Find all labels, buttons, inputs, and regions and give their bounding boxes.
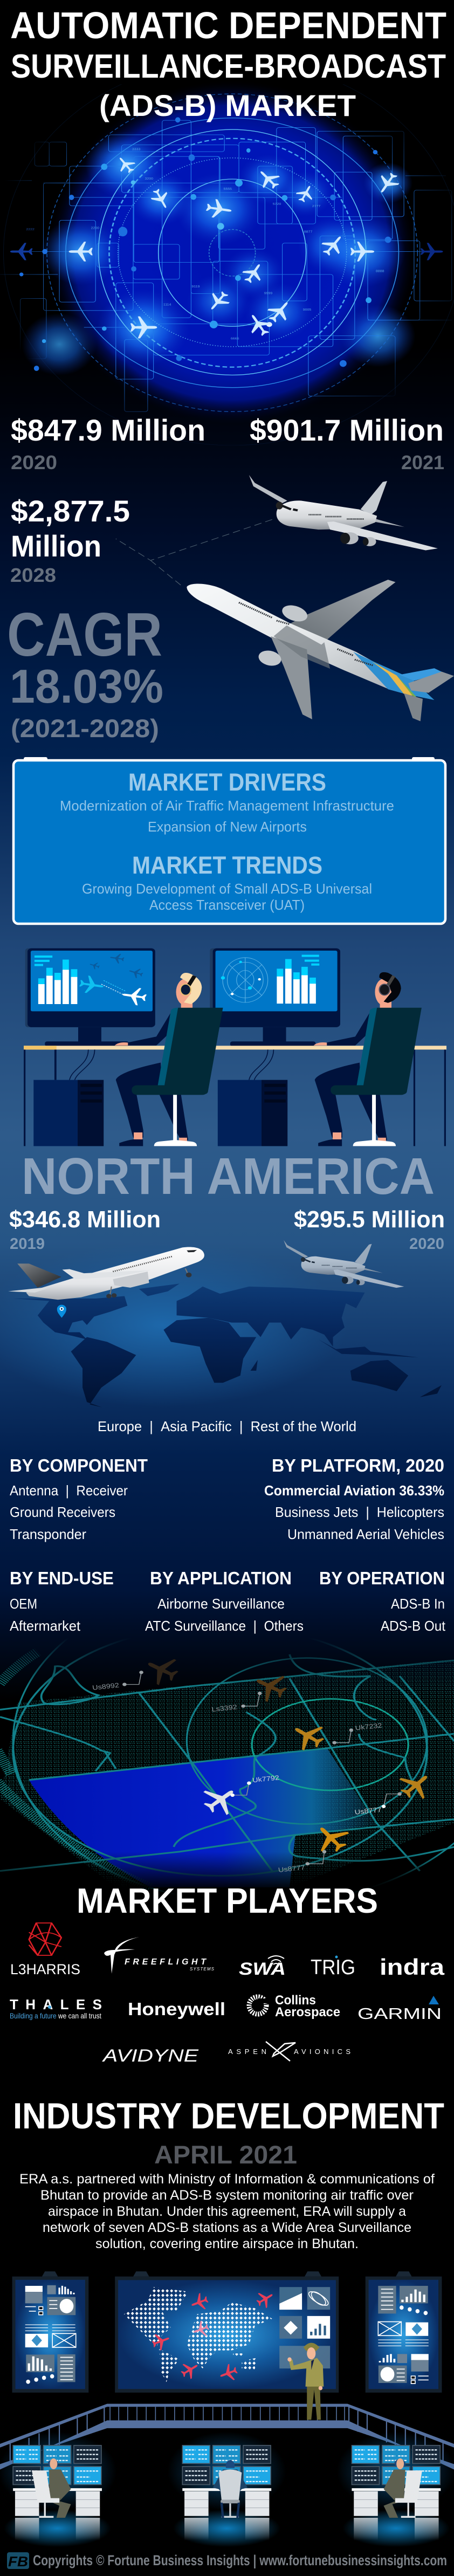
railing walkway	[0, 2404, 454, 2470]
logo: Garmin	[357, 1996, 442, 2023]
list: trends: Growing Development of Small ADS-B Universal	[82, 881, 372, 897]
computer towers	[33, 1080, 287, 1146]
dotted world map	[124, 2287, 272, 2382]
regional values: $295.5 Million	[294, 1206, 445, 1233]
outer tick ring	[0, 1652, 150, 1887]
radar labels: 9999	[264, 292, 273, 295]
list: trends: Access Transceiver (UAT)	[149, 897, 305, 913]
segment: by operation: ADS-B Out	[381, 1618, 446, 1634]
tracked aircraft: Uk7792	[252, 1774, 280, 1784]
heading: North America: NORTH AMERICA	[22, 1148, 435, 1205]
logo: Avidyne: AVIDYNE	[101, 2046, 199, 2065]
tracked aircraft: Us8777	[354, 1806, 382, 1816]
radar labels: 9119	[191, 285, 200, 288]
date: April 2021: APRIL 2021	[154, 2140, 297, 2169]
tracked aircraft: Us8992	[92, 1681, 120, 1692]
heading: market drivers: MARKET DRIVERS	[128, 768, 326, 796]
radar labels: 8877	[304, 230, 313, 233]
market size values: 2028	[10, 564, 56, 586]
list: drivers: Expansion of New Airports	[148, 819, 307, 835]
radar labels	[26, 148, 384, 340]
airplane: white jet taking off	[8, 1247, 204, 1300]
radar labels: 1114	[163, 303, 171, 306]
market size values: $847.9 Million	[11, 413, 205, 447]
radar labels: 5720	[273, 202, 281, 206]
airplane: small jet	[284, 1240, 404, 1288]
segment: by platform: BY PLATFORM, 2020	[272, 1455, 444, 1475]
segment: by operation: BY OPERATION	[319, 1568, 445, 1588]
screen: left wall display	[12, 2271, 88, 2393]
logo: SWA: SWA	[239, 1959, 286, 1979]
workstation: right	[337, 2432, 454, 2547]
logo: Thales	[10, 1996, 102, 2020]
grid and coast lines	[0, 1641, 454, 1893]
text block: development description: solution, covering entire airspace in Bhutan.	[95, 2236, 359, 2251]
logo: FreeFlight Systems: SYSTEMS	[190, 1967, 215, 1972]
logo: Thales: Building a future we can all trust	[10, 2011, 101, 2020]
desk	[24, 1046, 446, 1146]
segment: by platform: Business Jets | Helicopters	[275, 1504, 444, 1520]
radar labels: 3200	[145, 177, 153, 181]
logo: Honeywell: Honeywell	[128, 1999, 225, 2019]
continents	[13, 1283, 442, 1407]
airplane: large liveried jet	[187, 580, 454, 721]
side widgets	[279, 2287, 302, 2310]
plane glows	[22, 131, 416, 375]
market size values	[10, 413, 444, 586]
CAGR: CAGR	[7, 601, 162, 669]
text block: development description: ERA a.s. partnered with Ministry of Information & communications of	[19, 2172, 435, 2187]
illustration: airplanes	[116, 475, 454, 721]
radar labels: 8888	[376, 270, 384, 273]
highlighted sector	[29, 1748, 376, 1887]
logo: Fortune Business Insights: FB	[8, 2553, 28, 2570]
segment: by application: Airborne Surveillance	[157, 1596, 285, 1612]
regional values	[9, 1206, 445, 1253]
segment: by application: ATC Surveillance | Others	[145, 1618, 304, 1634]
segment: by platform	[264, 1455, 444, 1542]
radar labels: 2777	[312, 204, 321, 208]
radar labels: 2200	[91, 226, 100, 230]
market size values: $901.7 Million	[250, 413, 444, 447]
regional values: 2019	[10, 1235, 45, 1253]
segment: by component: BY COMPONENT	[10, 1455, 148, 1475]
regional values: 2020	[409, 1235, 444, 1253]
illustration: world map with planes	[0, 1240, 442, 1407]
tracked aircraft: Us8777	[278, 1864, 306, 1874]
logo: L3Harris	[10, 1923, 80, 1977]
logo: Trig: TRIG	[311, 1956, 355, 1979]
segment: by component: Transponder	[10, 1526, 86, 1542]
segment: by end-use: Aftermarket	[10, 1618, 81, 1634]
segment: by end-use	[10, 1568, 114, 1634]
segment: by component: Antenna | Receiver	[10, 1482, 128, 1499]
logo: FreeFlight Systems	[104, 1937, 215, 1974]
icon: location pin	[57, 1305, 66, 1318]
controller one	[115, 973, 223, 1146]
segment: by component: Ground Receivers	[10, 1504, 115, 1520]
monitor: radar and bar chart	[210, 948, 340, 1046]
radar labels: 6666	[231, 337, 239, 340]
tracked aircraft: Uk7232	[355, 1722, 382, 1732]
logo: Collins Aerospace	[249, 1993, 340, 2019]
tracked aircraft	[92, 1651, 438, 1874]
segment: by application	[145, 1568, 304, 1634]
segment: by platform: Unmanned Aerial Vehicles	[287, 1526, 444, 1542]
dashed route	[116, 519, 272, 587]
monitor: bar chart and planes	[25, 948, 155, 1046]
heading: market players: MARKET PLAYERS	[77, 1881, 378, 1920]
figure: officer	[287, 2343, 324, 2420]
logo: Aspen Avionics: ASPEN	[228, 2048, 266, 2056]
illustration: air traffic control room	[0, 2271, 454, 2547]
screen: right wall display	[366, 2271, 442, 2393]
logo: Garmin: GARMIN	[357, 2005, 442, 2023]
radar labels: 9005	[303, 308, 312, 312]
logo: Aspen Avionics: AVIONICS	[294, 2048, 350, 2056]
list: drivers	[60, 798, 394, 835]
text block: development description	[19, 2172, 435, 2251]
market size values: 2020	[11, 451, 57, 473]
logos: market players	[10, 1923, 445, 2065]
logo: Collins Aerospace: Aerospace	[275, 2005, 340, 2019]
logo: Aspen Avionics	[228, 2042, 350, 2061]
list: drivers: Modernization of Air Traffic Management Infrastructure	[60, 798, 394, 814]
segment: by component	[10, 1455, 148, 1542]
binary texture	[0, 1659, 454, 1887]
logo: Thales: THALES	[10, 1996, 102, 2012]
segment: by operation: ADS-B In	[391, 1596, 445, 1612]
node dots	[19, 117, 391, 371]
CAGR: 18.03%	[10, 660, 163, 713]
airplane: grey jet	[249, 475, 438, 551]
segment: by application: BY APPLICATION	[150, 1568, 292, 1588]
radar labels: 3333	[132, 148, 141, 151]
CAGR: (2021-2028)	[11, 714, 159, 743]
regional values: $346.8 Million	[9, 1206, 161, 1233]
text block: development description: airspace in Bhutan. Under this agreement, ERA will supply a	[48, 2204, 406, 2219]
logo: Indra: indra	[380, 1954, 445, 1980]
segment: by end-use: OEM	[10, 1596, 37, 1612]
market size values: Million	[11, 529, 101, 563]
logo: Collins Aerospace: Collins	[275, 1993, 316, 2008]
circuit lines	[0, 120, 452, 411]
workstation: left	[0, 2432, 116, 2547]
text block: development description: network of seven ADS-B stations as a Wide Area Surveillance	[43, 2220, 411, 2235]
illustration: radar hero	[0, 60, 454, 445]
footer: copyright	[7, 2552, 447, 2570]
title: (ADS-B) MARKET	[99, 88, 356, 122]
tracked aircraft: Ls3392	[211, 1703, 238, 1713]
segment: by operation	[319, 1568, 446, 1634]
heading: market trends: MARKET TRENDS	[132, 851, 322, 879]
radar rings	[3, 60, 454, 445]
illustration: air traffic controllers	[24, 948, 446, 1146]
screen: world map display	[115, 2271, 339, 2393]
radar labels: 2222	[26, 228, 35, 231]
text block: development description: Bhutan to provide an ADS-B system monitoring air traffic over	[40, 2188, 414, 2203]
market size values: 2021	[401, 451, 444, 473]
bottom fade	[0, 1852, 454, 1888]
segment: by end-use: BY END-USE	[10, 1568, 114, 1588]
map planes	[150, 2288, 277, 2384]
logo: FreeFlight Systems: FREEFLIGHT	[125, 1957, 207, 1967]
CAGR	[7, 601, 163, 743]
other regions: Europe | Asia Pacific | Rest of the World	[98, 1418, 356, 1434]
radar planes	[10, 154, 443, 339]
segment: by platform: Commercial Aviation 36.33%	[264, 1482, 444, 1499]
workstation: centre	[167, 2432, 286, 2547]
list: trends	[82, 881, 372, 913]
illustration: flight tracking radar map	[0, 1641, 454, 1893]
radar labels: 5555	[224, 187, 232, 191]
logo: L3Harris: L3HARRIS	[10, 1961, 80, 1977]
title	[10, 4, 446, 122]
panel: market drivers and trends	[13, 757, 445, 924]
controller two	[314, 972, 422, 1146]
market size values: $2,877.5	[11, 494, 130, 528]
